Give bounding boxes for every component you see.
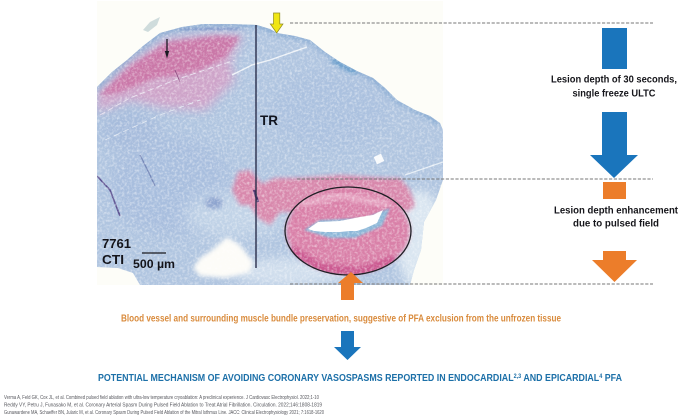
- icon: orange up arrow: [338, 272, 363, 300]
- references: Reddy VY, Petru J, Funasako M, et al. Coronary Arterial Spasm During Pulsed Field Ablation to Treat Atrial Fibrillation. Circulation. 2022;146:1808-1819: [4, 402, 322, 408]
- lesion tears: [232, 47, 307, 75]
- heading: potential mechanism: 2,3: [514, 373, 522, 380]
- references: Verma A, Feld GK, Cox JL, et al. Combined pulsed field ablation with ultra-low temperature cryoablation: A preclinical experience. J Cardiovasc Electrophysiol. 2022;1-10: [4, 395, 319, 401]
- references: [4, 395, 324, 416]
- heading: potential mechanism: POTENTIAL MECHANISM OF AVOIDING CORONARY VASOSPASMS REPORTED IN ENDOCARDIAL: [98, 372, 590, 384]
- scale bar: 500 µm: [133, 257, 175, 271]
- hole near top right of bundle: [374, 154, 384, 164]
- heading: potential mechanism: PFA: [602, 372, 622, 384]
- dashed depth guides: [290, 23, 653, 284]
- heading: potential mechanism: 4: [599, 373, 603, 380]
- label: TR: TR: [260, 112, 278, 128]
- label: specimen id: [102, 236, 131, 267]
- label: specimen id: CTI: [102, 252, 124, 267]
- tissue section: [97, 20, 447, 290]
- heading: potential mechanism: AND EPICARDIAL: [521, 372, 600, 384]
- muscle inside ring: [286, 188, 410, 274]
- vessel lumen: [308, 210, 383, 232]
- small white debris: [143, 17, 160, 32]
- muscle bundle: [232, 170, 415, 225]
- panel: histology micrograph: [97, 1, 447, 290]
- text: pulsed field enhancement: due to pulsed field: [573, 218, 659, 230]
- tissue grain: [97, 20, 447, 286]
- micrograph background: [97, 1, 443, 285]
- white bottom cavity: [193, 237, 253, 278]
- transmural reference line: [255, 25, 257, 268]
- icon: orange arrow: [592, 251, 637, 282]
- lower left dark patch: [205, 197, 223, 209]
- text: vessel preservation finding: Blood vessel and surrounding muscle bundle preservation, suggestive of PFA exclusion from the unfrozen tissue: [121, 314, 561, 324]
- label: specimen id: 7761: [102, 236, 131, 251]
- icon: blue bar: [602, 28, 627, 69]
- blue epicardial rim: [97, 24, 440, 123]
- icon: blue down arrow: [334, 331, 361, 360]
- icon: orange bar: [603, 182, 626, 199]
- text: ULTC lesion depth: single freeze ULTC: [572, 88, 656, 100]
- text: pulsed field enhancement: Lesion depth enhancement: [554, 206, 679, 216]
- vessel outline ring: [285, 187, 411, 275]
- references: Gunawardene MA, Schaeffer BN, Jularic M, et al. Coronary Spasm During Pulsed Field Ablation of the Mitral Isthmus Line. JACC: Clinical Electrophysiology 2021; 7:1618-1620: [4, 410, 324, 416]
- dark vessel streaks: [97, 176, 120, 216]
- text: pulsed field enhancement: [554, 206, 679, 230]
- icon: yellow arrow: [270, 13, 283, 33]
- text: ULTC lesion depth: [551, 74, 677, 100]
- icon: blue arrow: [590, 112, 638, 178]
- vessel wall: [304, 208, 390, 238]
- pink lesion area: [97, 34, 243, 112]
- icon: small black arrow: [165, 39, 169, 58]
- text: ULTC lesion depth: Lesion depth of 30 seconds,: [551, 74, 677, 86]
